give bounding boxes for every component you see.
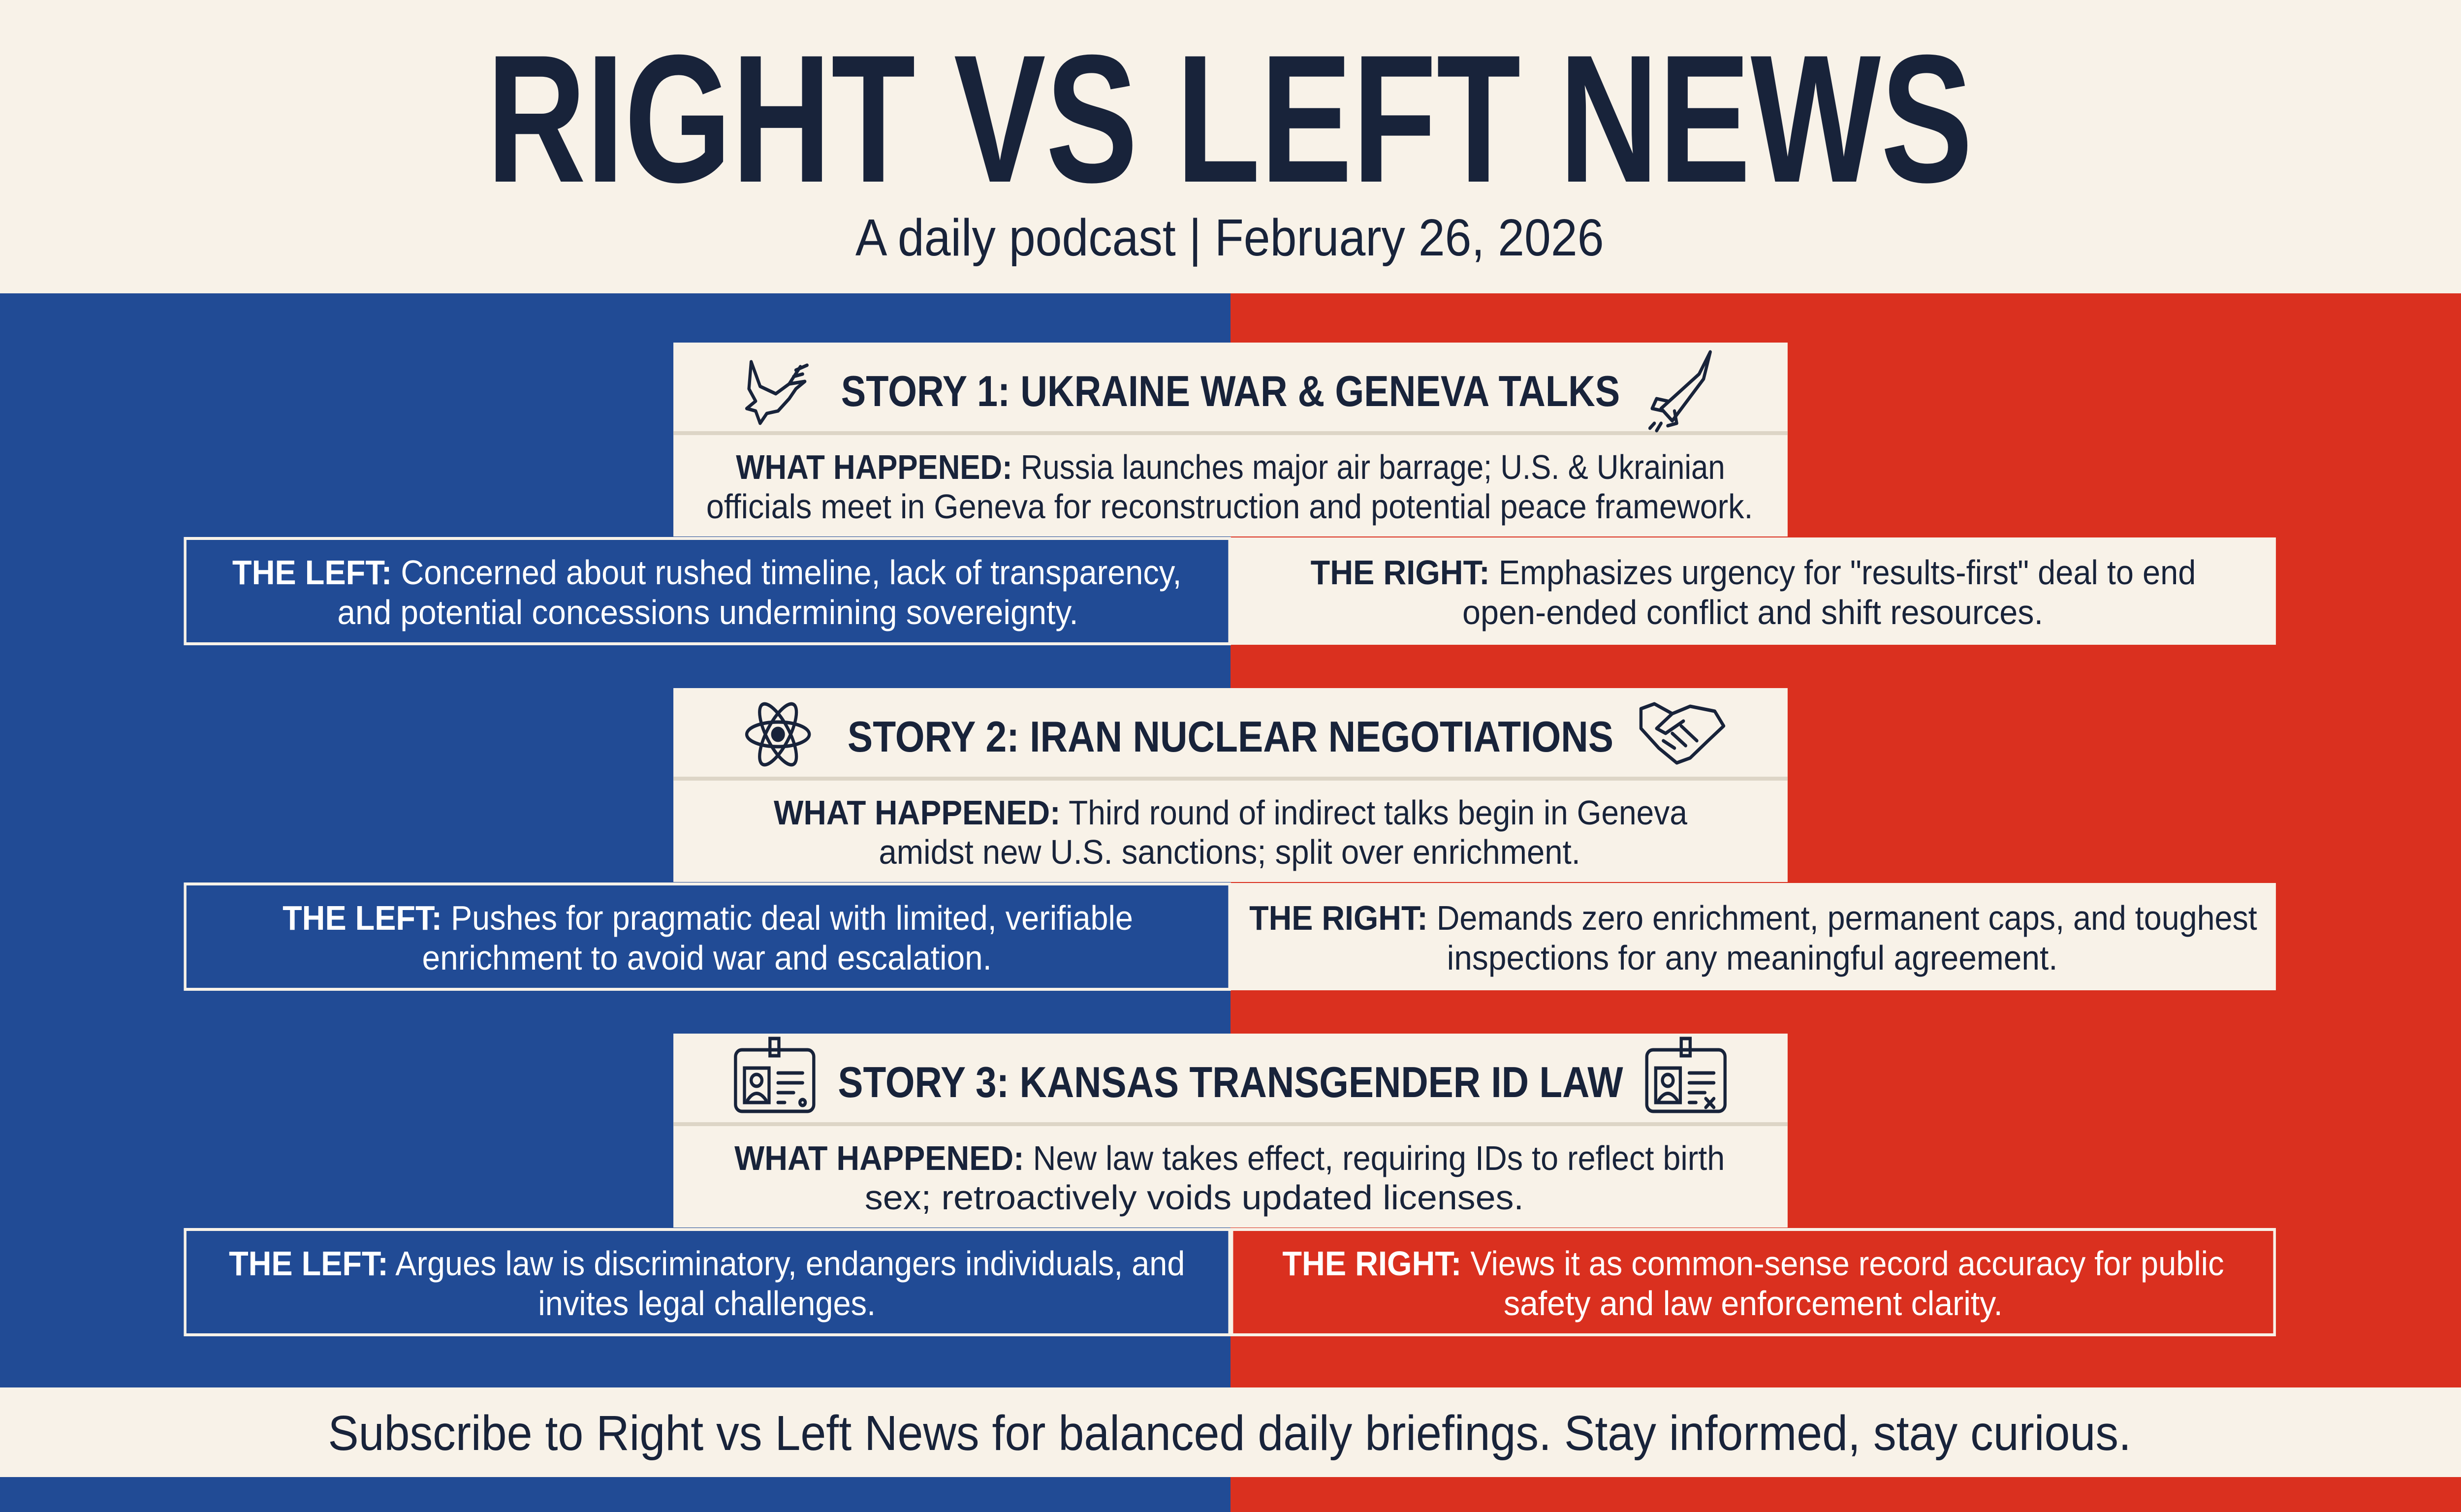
story 3 right view: safety and law enforcement clarity. (1504, 1284, 2003, 1323)
story 1 (185, 343, 2276, 645)
story 1 heading: STORY 1: UKRAINE WAR & GENEVA TALKS (841, 367, 1620, 415)
icon: id card right (1647, 1039, 1725, 1111)
icon: handshake (1641, 704, 1724, 763)
background red half (1230, 293, 2461, 1512)
story 1 right view: THE RIGHT: Emphasizes urgency for "results-first" deal to end (1311, 553, 2196, 592)
story 3 right view (1232, 1229, 2274, 1335)
story 2 (185, 688, 2276, 990)
icon: id card left (735, 1039, 814, 1111)
story 3 (185, 1034, 2274, 1335)
story 3 header box (673, 1034, 1788, 1228)
footer band (0, 1387, 2461, 1477)
background header cream (0, 0, 2461, 293)
story 2 right view (1230, 883, 2276, 990)
story 1 left view: and potential concessions undermining sovereignty. (337, 593, 1078, 632)
story 3 left view: invites legal challenges. (538, 1284, 876, 1323)
story 3 what happened (734, 1139, 1725, 1217)
story 1 header box (673, 343, 1788, 536)
icon: dove (747, 362, 807, 423)
story 2 heading: STORY 2: IRAN NUCLEAR NEGOTIATIONS (848, 712, 1613, 761)
story 1 right view: open-ended conflict and shift resources. (1462, 593, 2043, 632)
story 1 left view (185, 538, 1230, 644)
story 2 right view: THE RIGHT: Demands zero enrichment, permanent caps, and toughest (1249, 899, 2257, 938)
story 2 right view: inspections for any meaningful agreement. (1447, 939, 2058, 977)
story 2 what happened: amidst new U.S. sanctions; split over enrichment. (879, 833, 1580, 872)
title: RIGHT VS LEFT NEWS (486, 17, 1973, 220)
story 3 heading: STORY 3: KANSAS TRANSGENDER ID LAW (838, 1058, 1623, 1106)
story 1 left view: THE LEFT: Concerned about rushed timeline, lack of transparency, (232, 553, 1182, 592)
icon: rocket (1650, 352, 1710, 431)
story 1 what happened: officials meet in Geneva for reconstruction and potential peace framework. (706, 487, 1753, 526)
story 2 header box (673, 688, 1788, 882)
story 3 left view (185, 1229, 1230, 1335)
story 1 what happened: WHAT HAPPENED: Russia launches major air barrage; U.S. & Ukrainian (736, 448, 1725, 487)
story 3 right view: THE RIGHT: Views it as common-sense record accuracy for public (1282, 1244, 2224, 1283)
story 1 what happened (706, 448, 1753, 526)
story 2 left view: THE LEFT: Pushes for pragmatic deal with limited, verifiable (283, 899, 1133, 938)
story 3 what happened: WHAT HAPPENED: New law takes effect, requiring IDs to reflect birth (734, 1139, 1725, 1178)
footer text: Subscribe to Right vs Left News for balanced daily briefings. Stay informed, stay curious. (328, 1406, 2131, 1461)
story 2 what happened: WHAT HAPPENED: Third round of indirect talks begin in Geneva (774, 793, 1688, 832)
icon: atom (747, 698, 809, 770)
story 1 right view (1230, 537, 2276, 645)
story 2 what happened (774, 793, 1688, 872)
story 3 what happened: sex; retroactively voids updated licenses. (865, 1178, 1524, 1217)
background blue half (0, 293, 1230, 1512)
subtitle: A daily podcast | February 26, 2026 (855, 209, 1604, 267)
story 2 left view: enrichment to avoid war and escalation. (422, 939, 992, 977)
story 2 left view (185, 884, 1230, 989)
story 3 left view: THE LEFT: Argues law is discriminatory, endangers individuals, and (229, 1244, 1185, 1283)
